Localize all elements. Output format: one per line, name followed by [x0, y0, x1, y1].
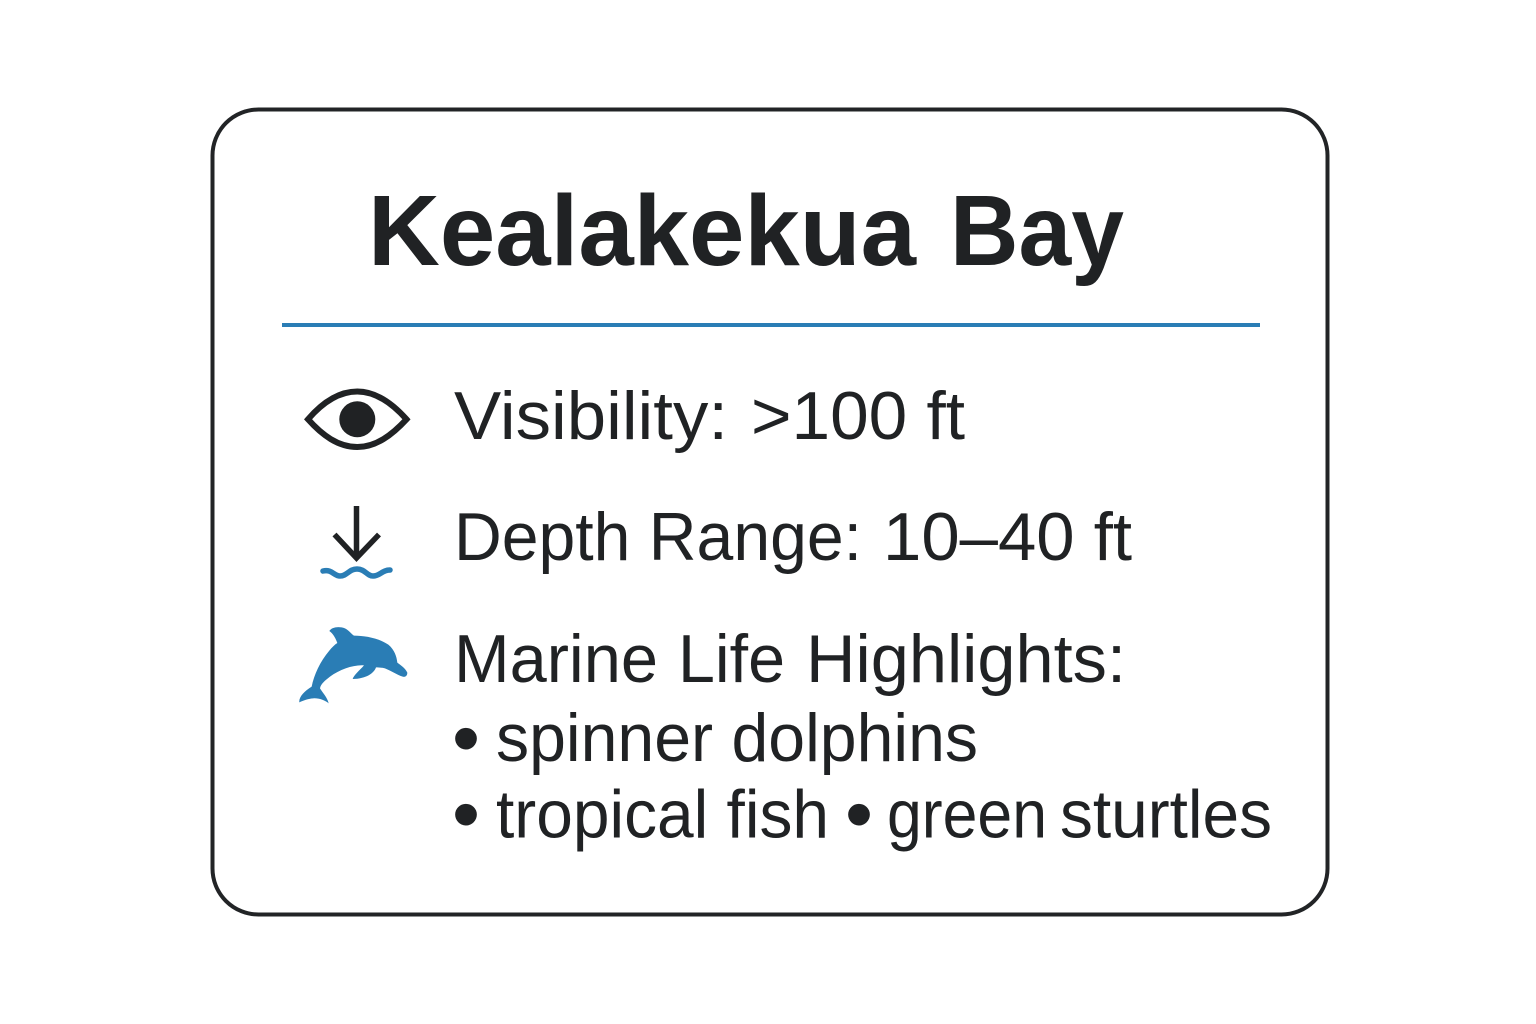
list items: tropical fish and green sturtles	[452, 769, 1272, 858]
marine life heading	[454, 621, 1126, 697]
marine life heading: Life	[678, 621, 785, 697]
marine life heading: Marine	[454, 621, 658, 697]
list items: tropical fish and green sturtles: sturtles	[1060, 776, 1272, 852]
list items: tropical fish and green sturtles: tropical fish	[496, 776, 829, 852]
title divider	[282, 323, 1260, 327]
list items: tropical fish and green sturtles: green	[887, 776, 1047, 852]
depth range text: Depth Range:	[454, 499, 862, 575]
visibility text	[454, 378, 965, 454]
icon: dolphin	[299, 627, 407, 703]
list item: spinner dolphins: spinner dolphins	[496, 700, 978, 776]
title: Kealakekua	[368, 175, 917, 287]
visibility text: >100 ft	[751, 378, 965, 454]
title: Bay	[950, 175, 1124, 287]
list items: tropical fish and green sturtles: •	[845, 769, 873, 858]
marine life heading: Highlights:	[806, 621, 1126, 697]
icon: eye	[308, 392, 406, 447]
list items: tropical fish and green sturtles: •	[452, 769, 480, 858]
depth range text: 10–40 ft	[883, 499, 1132, 575]
panel: info card	[212, 110, 1328, 914]
list item: spinner dolphins: •	[452, 693, 480, 782]
depth range text	[454, 499, 1132, 575]
visibility text: Visibility:	[454, 378, 728, 454]
icon: depth arrow over water	[323, 506, 390, 576]
